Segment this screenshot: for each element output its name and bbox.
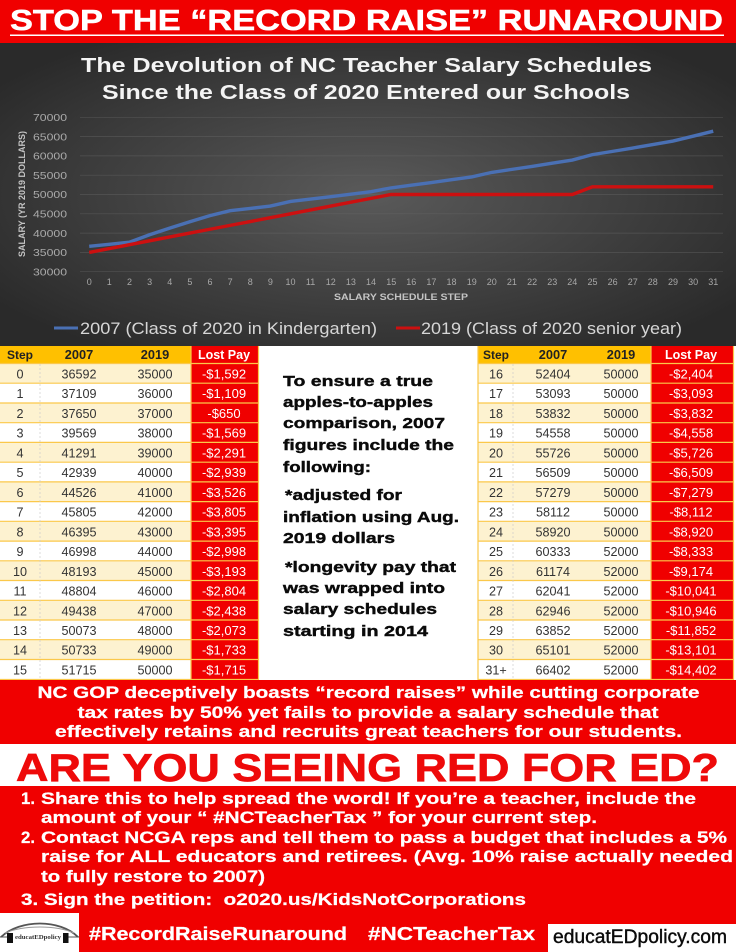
- red banner: deceptive boasts statement: NC GOP deceptively boasts “record raises” while cutting corporate: [38, 683, 700, 702]
- hashtags: #NCTeacherTax: [368, 923, 536, 944]
- right salary table: steps 16 to 31+: 50000: [603, 466, 639, 480]
- right table header: 2019: [607, 347, 635, 362]
- right salary table: steps 16 to 31+: -$3,832: [669, 406, 713, 421]
- right salary table: steps 16 to 31+: 58112: [536, 506, 570, 520]
- action 1: 1.: [21, 789, 35, 808]
- right salary table: steps 16 to 31+: 50000: [603, 506, 639, 520]
- x axis labels: 22: [527, 277, 537, 287]
- left salary table: steps 0 to 15: 36000: [137, 387, 173, 401]
- left table header: 2019: [141, 347, 169, 362]
- x axis labels: 28: [648, 277, 658, 287]
- right table header: 2007: [539, 347, 567, 362]
- right salary table: steps 16 to 31+: 52000: [603, 644, 639, 658]
- right salary table: steps 16 to 31+: -$10,946: [665, 603, 717, 618]
- left salary table: steps 0 to 15: 50733: [61, 644, 97, 658]
- y axis labels: 45000: [33, 208, 67, 220]
- left table header: [7, 347, 250, 362]
- note: how 2007 figures were adjusted: [282, 373, 459, 640]
- left salary table: steps 0 to 15: 43000: [137, 525, 173, 539]
- right salary table: steps 16 to 31+: 50000: [603, 525, 639, 539]
- right salary table: steps 16 to 31+: -$3,093: [669, 386, 713, 401]
- right salary table: steps 16 to 31+: 22: [489, 486, 503, 500]
- left salary table: steps 0 to 15: 6: [16, 486, 24, 500]
- right salary table: steps 16 to 31+: 52000: [603, 664, 639, 678]
- left salary table: steps 0 to 15: 13: [13, 624, 27, 638]
- y axis labels: 55000: [33, 170, 67, 182]
- left salary table: steps 0 to 15: 48193: [61, 565, 97, 579]
- left salary table: steps 0 to 15: 51715: [61, 664, 97, 678]
- left salary table: steps 0 to 15: 45000: [137, 565, 173, 579]
- left salary table: steps 0 to 15: -$1,592: [202, 366, 246, 382]
- action 2: raise for ALL educators and retirees. (Avg. 10% raise actually needed: [41, 847, 733, 866]
- x axis labels: 5: [187, 277, 192, 287]
- heading: are you seeing red for ed: ARE YOU SEEING RED FOR ED?: [16, 747, 719, 790]
- x axis title: SALARY SCHEDULE STEP: [334, 292, 468, 302]
- note: how 2007 figures were adjusted: inflation using Aug.: [283, 509, 459, 526]
- hashtags: [89, 923, 536, 944]
- x axis labels: 0: [87, 277, 92, 287]
- note: how 2007 figures were adjusted: was wrapped into: [282, 580, 445, 597]
- y axis labels: 70000: [33, 112, 67, 124]
- left salary table: steps 0 to 15: 48804: [61, 584, 97, 598]
- left salary table: steps 0 to 15: 45805: [61, 506, 97, 520]
- x axis labels: 20: [487, 277, 497, 287]
- red banner: deceptive boasts statement: [0, 680, 736, 744]
- left salary table: steps 0 to 15: -$2,939: [202, 465, 246, 480]
- right salary table: steps 16 to 31+: 52000: [603, 545, 639, 559]
- left salary table: steps 0 to 15: 1: [16, 387, 24, 401]
- left salary table: steps 0 to 15: -$1,569: [202, 426, 246, 441]
- right salary table: steps 16 to 31+: [478, 346, 734, 680]
- right salary table: steps 16 to 31+: 28: [489, 604, 503, 618]
- left table header: Lost Pay: [198, 348, 250, 362]
- hashtags: #RecordRaiseRunaround: [89, 923, 347, 944]
- left salary table: steps 0 to 15: -$2,438: [202, 603, 246, 618]
- left salary table: steps 0 to 15: 15: [13, 664, 27, 678]
- right salary table: steps 16 to 31+: -$7,279: [669, 485, 713, 500]
- y axis labels: 60000: [33, 151, 67, 163]
- x axis labels: 31: [708, 277, 718, 287]
- right salary table: steps 16 to 31+: -$11,852: [666, 623, 716, 638]
- action 1: [21, 789, 696, 827]
- right salary table: steps 16 to 31+: -$9,174: [669, 564, 713, 579]
- right salary table: steps 16 to 31+: -$10,041: [665, 584, 717, 598]
- left salary table: steps 0 to 15: -$3,526: [202, 485, 246, 500]
- x axis labels: 24: [567, 277, 577, 287]
- chart title: The Devolution of NC Teacher Salary Schedules: [81, 55, 652, 77]
- right salary table: steps 16 to 31+: 24: [489, 525, 503, 539]
- left salary table: steps 0 to 15: 50000: [137, 664, 173, 678]
- right salary table: steps 16 to 31+: 16: [489, 368, 503, 382]
- right salary table: steps 16 to 31+: 31+: [485, 664, 507, 678]
- right salary table: steps 16 to 31+: 50000: [603, 407, 639, 421]
- left salary table: steps 0 to 15: 37109: [61, 387, 97, 401]
- x axis labels: 23: [547, 277, 557, 287]
- right salary table: steps 16 to 31+: 52000: [603, 624, 639, 638]
- x axis labels: 6: [207, 277, 213, 287]
- left salary table: steps 0 to 15: 5: [16, 466, 24, 480]
- x axis labels: 3: [147, 277, 152, 287]
- left salary table: steps 0 to 15: 41000: [137, 486, 173, 500]
- x axis labels: 25: [587, 277, 598, 287]
- note: how 2007 figures were adjusted: starting in 2014: [283, 623, 429, 640]
- note: how 2007 figures were adjusted: following:: [283, 459, 371, 476]
- right salary table: steps 16 to 31+: -$13,101: [665, 643, 717, 658]
- left salary table: steps 0 to 15: 48000: [137, 624, 173, 638]
- right salary table: steps 16 to 31+: 60333: [535, 545, 571, 559]
- right salary table: steps 16 to 31+: 25: [489, 545, 503, 559]
- right salary table: steps 16 to 31+: -$8,920: [669, 524, 713, 539]
- action 1: amount of your “ #NCTeacherTax ” for your current step.: [41, 808, 597, 827]
- header banner: [0, 0, 736, 43]
- action 3: 3. Sign the petition: o2020.us/KidsNotCorporations: [21, 890, 526, 909]
- left salary table: steps 0 to 15: -$650: [207, 406, 241, 421]
- website label: educatEDpolicy.com: [553, 927, 727, 948]
- left salary table: steps 0 to 15: 46395: [61, 525, 97, 539]
- right salary table: steps 16 to 31+: 20: [489, 446, 503, 460]
- right salary table: steps 16 to 31+: 18: [489, 407, 503, 421]
- left salary table: steps 0 to 15: 49000: [137, 644, 173, 658]
- right salary table: steps 16 to 31+: -$5,726: [669, 445, 713, 460]
- x axis labels: 30: [688, 277, 698, 287]
- left salary table: steps 0 to 15: 7: [16, 506, 24, 520]
- y axis labels: 30000: [33, 266, 67, 278]
- logo: educatEDpolicy bridge: educatEDpolicy: [15, 934, 62, 941]
- left salary table: steps 0 to 15: 42000: [137, 506, 173, 520]
- left salary table: steps 0 to 15: 46000: [137, 584, 173, 598]
- left table header: 2007: [65, 347, 93, 362]
- action 2: [21, 828, 733, 886]
- panel: call to action list: [0, 786, 736, 952]
- left salary table: steps 0 to 15: -$2,073: [202, 623, 246, 638]
- right salary table: steps 16 to 31+: 54558: [535, 427, 571, 441]
- y axis labels: [33, 112, 67, 278]
- left salary table: steps 0 to 15: 41291: [61, 446, 97, 460]
- left salary table: steps 0 to 15: 47000: [137, 604, 173, 618]
- x axis labels: 14: [366, 277, 376, 287]
- right salary table: steps 16 to 31+: 52404: [535, 368, 571, 382]
- right salary table: steps 16 to 31+: 65101: [535, 644, 571, 658]
- left salary table: steps 0 to 15: -$3,395: [202, 524, 246, 539]
- right salary table: steps 16 to 31+: 30: [489, 644, 503, 658]
- x axis labels: 27: [628, 277, 638, 287]
- line: 2019 salaries: [89, 187, 713, 252]
- left salary table: steps 0 to 15: 2: [16, 407, 24, 421]
- right salary table: steps 16 to 31+: 53093: [535, 387, 571, 401]
- right salary table: steps 16 to 31+: 23: [489, 506, 503, 520]
- right salary table: steps 16 to 31+: 50000: [603, 446, 639, 460]
- x axis labels: 12: [326, 277, 336, 287]
- x axis labels: 16: [406, 277, 416, 287]
- left salary table: steps 0 to 15: 46998: [61, 545, 97, 559]
- left salary table: steps 0 to 15: -$1,715: [202, 662, 246, 678]
- panel: line chart: [0, 43, 736, 346]
- line: 2007 salaries: [89, 131, 713, 246]
- left salary table: steps 0 to 15: 10: [13, 565, 27, 579]
- right salary table: steps 16 to 31+: 52000: [603, 584, 639, 598]
- right salary table: steps 16 to 31+: 50000: [603, 486, 639, 500]
- left salary table: steps 0 to 15: 3: [16, 427, 24, 441]
- right salary table: steps 16 to 31+: 53832: [535, 407, 571, 421]
- left salary table: steps 0 to 15: 4: [16, 446, 24, 460]
- right salary table: steps 16 to 31+: -$6,509: [669, 465, 713, 480]
- right salary table: steps 16 to 31+: 52000: [603, 565, 639, 579]
- right salary table: steps 16 to 31+: 61174: [536, 565, 570, 579]
- right salary table: steps 16 to 31+: 50000: [603, 387, 639, 401]
- x axis labels: 11: [306, 277, 315, 287]
- left salary table: steps 0 to 15: 40000: [137, 466, 173, 480]
- left salary table: steps 0 to 15: -$2,804: [202, 584, 246, 598]
- left salary table: steps 0 to 15: 9: [16, 545, 24, 559]
- x axis labels: 17: [426, 277, 436, 287]
- left salary table: steps 0 to 15: 50073: [61, 624, 97, 638]
- left salary table: steps 0 to 15: 35000: [137, 368, 173, 382]
- x axis labels: 9: [268, 277, 273, 287]
- note: how 2007 figures were adjusted: *adjusted for: [285, 487, 402, 504]
- left salary table: steps 0 to 15: 8: [16, 525, 24, 539]
- action 2: to fully restore to 2007): [41, 867, 265, 886]
- action 2: Contact NCGA reps and tell them to pass a budget that includes a 5%: [41, 828, 727, 847]
- right salary table: steps 16 to 31+: 27: [489, 584, 503, 598]
- x axis labels: 13: [346, 277, 356, 287]
- x axis labels: 15: [386, 277, 396, 287]
- left salary table: steps 0 to 15: 42939: [61, 466, 97, 480]
- x axis labels: 29: [668, 277, 678, 287]
- chart title: [81, 55, 652, 104]
- right salary table: steps 16 to 31+: 19: [489, 427, 503, 441]
- right salary table: steps 16 to 31+: 52000: [603, 604, 639, 618]
- legend: 2007 (Class of 2020 in Kindergarten): [80, 320, 377, 338]
- y axis labels: 50000: [33, 189, 67, 201]
- right salary table: steps 16 to 31+: 63852: [535, 624, 571, 638]
- left salary table: steps 0 to 15: 37000: [137, 407, 173, 421]
- left table header: Step: [7, 348, 33, 362]
- left salary table: steps 0 to 15: 38000: [137, 427, 173, 441]
- left salary table: steps 0 to 15: -$1,109: [202, 386, 246, 401]
- right salary table: steps 16 to 31+: 26: [489, 565, 503, 579]
- left salary table: steps 0 to 15: 37650: [61, 407, 97, 421]
- note: how 2007 figures were adjusted: apples-to-apples: [283, 394, 433, 411]
- y axis labels: 40000: [33, 228, 67, 240]
- left salary table: steps 0 to 15: 39569: [61, 427, 97, 441]
- right salary table: steps 16 to 31+: 57279: [535, 486, 571, 500]
- right salary table: steps 16 to 31+: -$8,112: [669, 505, 713, 520]
- red banner: deceptive boasts statement: tax rates by 50% yet fails to provide a salary schedule that: [78, 703, 659, 722]
- left salary table: steps 0 to 15: 44000: [137, 545, 173, 559]
- left salary table: steps 0 to 15: 49438: [61, 604, 97, 618]
- legend: [54, 320, 682, 338]
- website label: [548, 924, 736, 952]
- y axis labels: 35000: [33, 247, 67, 259]
- right table header: Lost Pay: [665, 348, 717, 362]
- left salary table: steps 0 to 15: 12: [13, 604, 27, 618]
- x axis labels: 2: [127, 277, 132, 287]
- note: how 2007 figures were adjusted: salary schedules: [283, 601, 437, 618]
- right salary table: steps 16 to 31+: 56509: [535, 466, 571, 480]
- left salary table: steps 0 to 15: [0, 346, 259, 680]
- left salary table: steps 0 to 15: 36592: [61, 368, 97, 382]
- x axis labels: [87, 277, 718, 287]
- x axis labels: 19: [467, 277, 477, 287]
- right salary table: steps 16 to 31+: 55726: [535, 446, 571, 460]
- x axis labels: 1: [107, 277, 112, 287]
- right salary table: steps 16 to 31+: 29: [489, 624, 503, 638]
- x axis labels: 26: [608, 277, 618, 287]
- y axis labels: 65000: [33, 131, 67, 143]
- x axis labels: 7: [228, 277, 233, 287]
- note: how 2007 figures were adjusted: comparison, 2007: [283, 415, 445, 432]
- left salary table: steps 0 to 15: -$3,193: [202, 564, 246, 579]
- note: how 2007 figures were adjusted: figures include the: [283, 437, 454, 454]
- right salary table: steps 16 to 31+: 62946: [535, 604, 571, 618]
- x axis labels: 18: [446, 277, 457, 287]
- y axis title: SALARY (YR 2019 DOLLARS): [17, 131, 28, 257]
- x axis labels: 21: [507, 277, 517, 287]
- right salary table: steps 16 to 31+: 50000: [603, 427, 639, 441]
- right salary table: steps 16 to 31+: -$14,402: [665, 662, 717, 678]
- right salary table: steps 16 to 31+: -$4,558: [669, 426, 713, 441]
- action 2: 2.: [21, 828, 35, 847]
- x axis labels: 4: [167, 277, 172, 287]
- left salary table: steps 0 to 15: -$2,998: [202, 544, 246, 559]
- logo: educatEDpolicy bridge: [0, 913, 79, 952]
- right salary table: steps 16 to 31+: 66402: [535, 664, 571, 678]
- x axis labels: 10: [285, 277, 296, 287]
- x axis labels: 8: [248, 277, 253, 287]
- right salary table: steps 16 to 31+: -$2,404: [669, 366, 713, 382]
- title: STOP THE “RECORD RAISE” RUNAROUND: [10, 5, 723, 37]
- left salary table: steps 0 to 15: -$2,291: [202, 445, 246, 460]
- right table header: [483, 347, 717, 362]
- note: how 2007 figures were adjusted: 2019 dollars: [283, 530, 395, 547]
- right table header: Step: [483, 348, 509, 362]
- left salary table: steps 0 to 15: 0: [16, 368, 24, 382]
- action 1: Share this to help spread the word! If you’re a teacher, include the: [41, 789, 696, 808]
- red banner: deceptive boasts statement: effectively retains and recruits great teachers for our students.: [55, 722, 682, 741]
- right salary table: steps 16 to 31+: 58920: [535, 525, 571, 539]
- right salary table: steps 16 to 31+: 17: [489, 387, 503, 401]
- left salary table: steps 0 to 15: 44526: [61, 486, 97, 500]
- left salary table: steps 0 to 15: -$1,733: [202, 643, 246, 658]
- chart title: Since the Class of 2020 Entered our Schools: [102, 82, 630, 104]
- note: how 2007 figures were adjusted: To ensure a true: [283, 373, 433, 390]
- left salary table: steps 0 to 15: 39000: [137, 446, 173, 460]
- right salary table: steps 16 to 31+: 21: [489, 466, 503, 480]
- note: how 2007 figures were adjusted: *longevity pay that: [285, 559, 456, 576]
- left salary table: steps 0 to 15: 14: [13, 644, 27, 658]
- right salary table: steps 16 to 31+: 50000: [603, 368, 639, 382]
- legend: 2019 (Class of 2020 senior year): [421, 320, 682, 338]
- left salary table: steps 0 to 15: 11: [13, 584, 27, 598]
- left salary table: steps 0 to 15: -$3,805: [202, 505, 246, 520]
- right salary table: steps 16 to 31+: 62041: [535, 584, 571, 598]
- right salary table: steps 16 to 31+: -$8,333: [669, 544, 713, 559]
